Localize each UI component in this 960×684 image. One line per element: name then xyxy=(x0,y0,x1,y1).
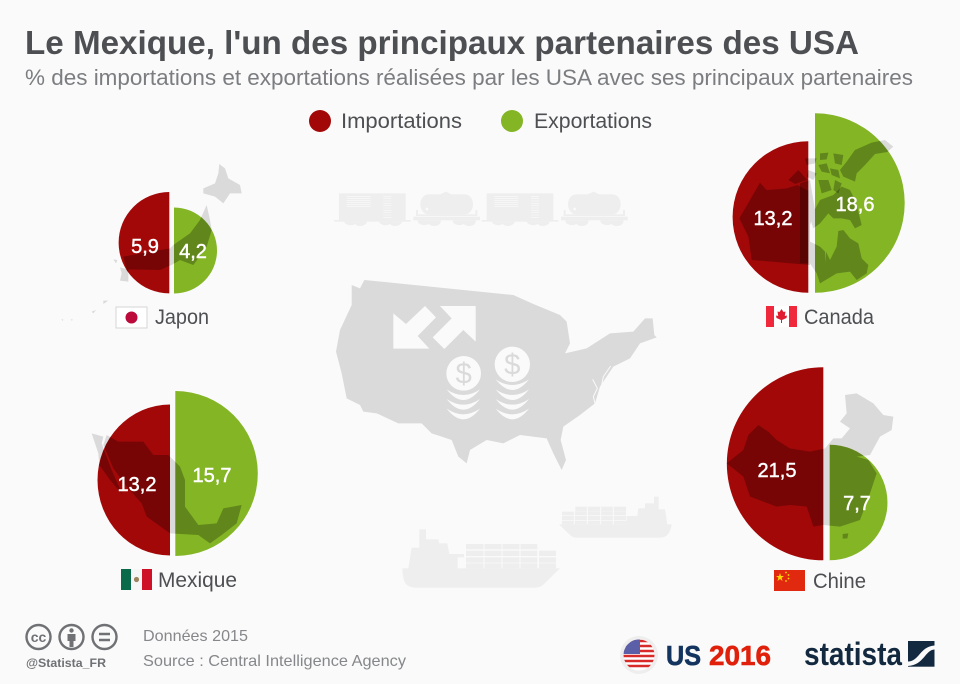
footer: data year: Données 2015 xyxy=(143,628,248,645)
decorative ships xyxy=(402,497,672,588)
label: Canada: Canada xyxy=(804,306,874,329)
value: Mexique importations: 13,2 xyxy=(118,474,156,496)
half circle: Chine exportations xyxy=(830,445,887,560)
panel: Canada xyxy=(733,113,905,329)
legend item: exportations: Exportations xyxy=(534,110,652,133)
map overlay: Mexique xyxy=(92,433,242,543)
brand: US 2016 xyxy=(666,640,771,671)
panel: Japon xyxy=(116,192,217,328)
map: United States with trade icons xyxy=(336,280,657,470)
value: Chine exportations: 7,7 xyxy=(843,493,871,515)
icon: coin stacks: $ xyxy=(504,348,520,381)
flag: Japon xyxy=(116,307,147,328)
half circle: Canada importations xyxy=(733,141,808,293)
icon: creative commons: cc xyxy=(31,629,46,645)
legend item: importations: Importations xyxy=(341,110,462,133)
panel: Chine xyxy=(727,367,893,593)
value: Canada exportations: 18,6 xyxy=(836,194,874,216)
label: Mexique: Mexique xyxy=(158,569,237,592)
map overlay: Japon xyxy=(124,217,212,272)
brand: US 2016: 2016 xyxy=(709,640,771,671)
label: Chine: Chine xyxy=(813,570,866,593)
half circle: Japon importations xyxy=(119,192,169,293)
subtitle: % des importations et exportations réalisées par les USA avec ses principaux partenaires xyxy=(25,65,913,90)
icon: exchange arrows xyxy=(393,306,476,349)
half circle: Mexique exportations xyxy=(175,391,258,556)
flag: Mexique xyxy=(121,569,152,590)
footer: licence icons xyxy=(26,625,116,649)
half circle: Canada exportations xyxy=(815,113,905,293)
flag: Chine xyxy=(774,570,805,591)
half circle: Mexique importations xyxy=(98,404,170,556)
brand: US 2016: US xyxy=(666,640,701,671)
grey silhouettes beneath charts xyxy=(61,140,893,543)
icon: no derivatives xyxy=(92,625,116,649)
value: Canada importations: 13,2 xyxy=(754,208,792,230)
value: Mexique exportations: 15,7 xyxy=(193,465,231,487)
icon: large container ship xyxy=(402,529,560,588)
map overlay: Canada xyxy=(739,140,893,283)
value: Chine importations: 21,5 xyxy=(758,460,796,482)
map overlay: Chine xyxy=(727,425,876,539)
icon: attribution xyxy=(60,625,84,649)
half circle: Chine importations xyxy=(727,367,823,560)
icon: statista logo xyxy=(908,641,934,667)
legend xyxy=(309,110,652,133)
value: Japon exportations: 4,2 xyxy=(179,241,207,263)
flag: Canada xyxy=(766,306,797,327)
icon: small container ship xyxy=(559,497,672,538)
decorative train xyxy=(334,192,628,226)
icon: coin stacks xyxy=(446,347,530,419)
footer: source: Source : Central Intelligence Agency xyxy=(143,653,406,670)
half circle: Japon exportations xyxy=(174,208,217,294)
icon: US flag badge xyxy=(620,636,658,674)
value: Japon importations: 5,9 xyxy=(131,236,159,258)
panel: Mexique xyxy=(92,391,258,592)
brand: statista wordmark: statista xyxy=(804,636,902,672)
icon: coin stacks: $ xyxy=(456,357,472,390)
handle: @Statista_FR xyxy=(26,658,107,670)
title: Le Mexique, l'un des principaux partenaires des USA xyxy=(25,24,859,61)
label: Japon: Japon xyxy=(155,306,209,329)
